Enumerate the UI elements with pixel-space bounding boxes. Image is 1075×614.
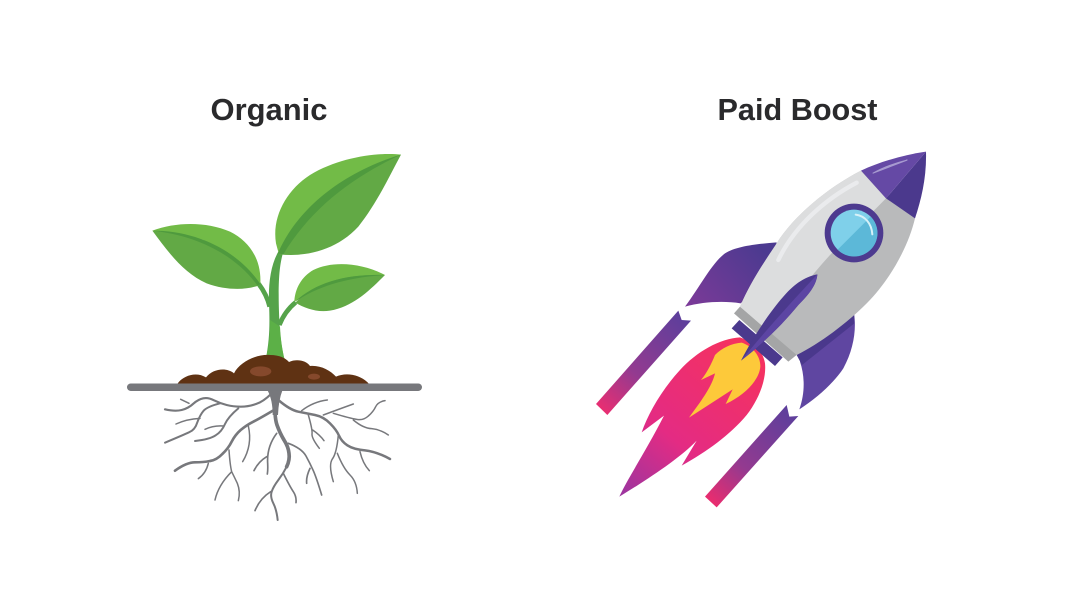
left exhaust strip [596, 311, 691, 415]
roots [165, 391, 390, 520]
nose cone dark side [886, 152, 926, 218]
soil [177, 355, 369, 384]
soil highlight small [308, 374, 320, 380]
heading: Paid Boost: Paid Boost [718, 92, 878, 127]
right fin [797, 312, 855, 409]
left second root [165, 403, 220, 443]
small leaf [294, 264, 385, 311]
body lit side [740, 171, 886, 333]
inner flame [689, 343, 760, 418]
small leaf lower half [295, 275, 385, 311]
illustration: seedling plant with roots [127, 154, 422, 520]
soil highlight large [250, 366, 271, 376]
root crown [268, 391, 282, 415]
nose cone lit side [861, 152, 926, 198]
sprout stem and leaves [152, 154, 401, 360]
left middle root [175, 410, 274, 471]
left leaf upper half [152, 224, 260, 284]
right fin shadow band [797, 312, 854, 365]
flame [619, 337, 765, 497]
main taproot lower [271, 467, 287, 520]
left leaf vein [152, 231, 260, 285]
left leaf lower half [152, 231, 259, 289]
lit lower stem [266, 320, 285, 360]
illustration: rocket launching [596, 152, 926, 507]
main taproot upper [275, 392, 289, 467]
heading: Organic: Organic [210, 92, 328, 127]
small leaf vein [295, 275, 385, 302]
ground line [127, 384, 422, 391]
porthole glass [831, 210, 877, 256]
fine left branches [176, 399, 250, 501]
large leaf lower half [279, 155, 401, 255]
right stem branch [279, 302, 296, 325]
right main root [278, 400, 390, 459]
left stem branch [258, 283, 270, 307]
rocket ship [732, 152, 926, 366]
nose highlight [873, 160, 907, 173]
centre fin lit [741, 274, 817, 361]
porthole ring [825, 204, 883, 262]
body highlight [778, 183, 857, 260]
left upper root [165, 393, 272, 411]
engine collar [732, 320, 783, 366]
stem [258, 252, 296, 360]
main stem [266, 252, 285, 360]
small leaf upper half [294, 264, 385, 302]
porthole glint [856, 215, 872, 234]
left fin [685, 242, 777, 307]
porthole glass shadow [838, 217, 877, 257]
outer flame [619, 337, 765, 497]
centre fin dark [741, 274, 817, 361]
right exhaust strip [705, 405, 798, 507]
large leaf [275, 154, 401, 255]
left third root [195, 408, 238, 441]
right fin lower [799, 313, 855, 409]
left leaf [152, 224, 260, 289]
fine centre branches [254, 433, 322, 511]
centre fin [741, 274, 817, 361]
base band [734, 307, 797, 362]
soil mound [177, 355, 369, 384]
large leaf vein [278, 155, 401, 254]
body shadow side [740, 171, 915, 355]
fine right branches [302, 400, 388, 493]
porthole [825, 204, 883, 262]
nose cone [861, 152, 926, 218]
large leaf upper half [275, 154, 401, 253]
